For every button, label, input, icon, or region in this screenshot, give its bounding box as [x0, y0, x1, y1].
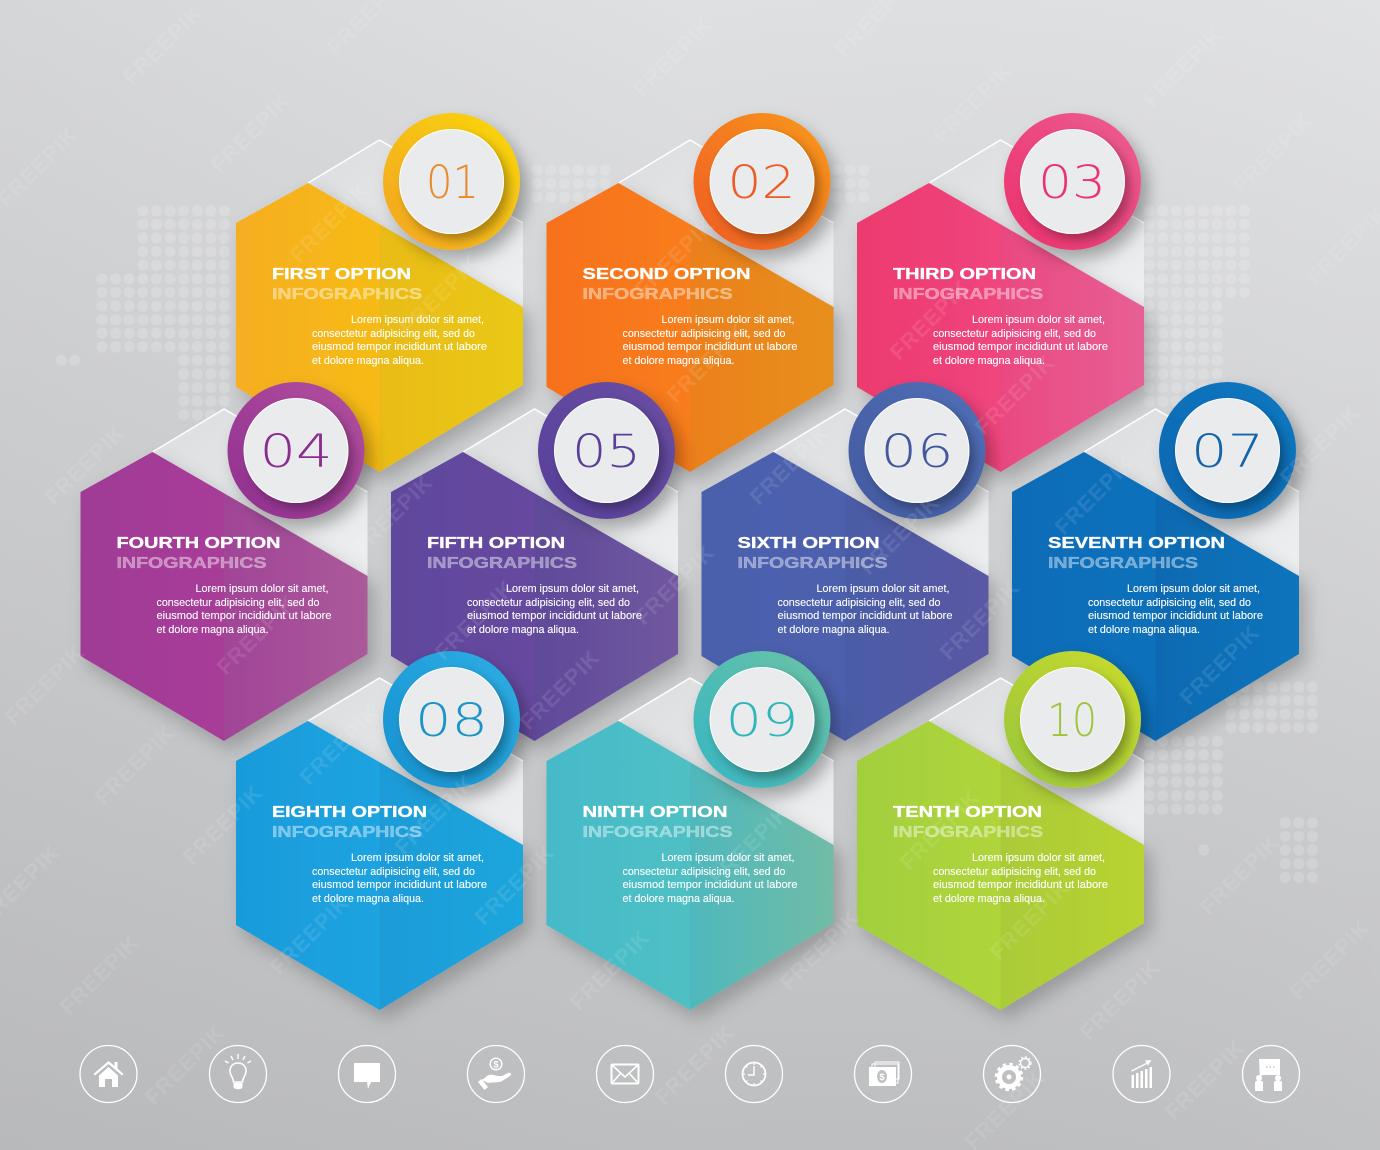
body text: et dolore magna aliqua.	[622, 893, 734, 905]
body text: consectetur adipisicing elit, sed do	[933, 328, 1096, 340]
heading: NINTH OPTION	[582, 804, 728, 821]
grey plate	[929, 678, 1144, 845]
watermark: FREEPIK	[265, 890, 355, 980]
body text	[622, 314, 798, 367]
body text	[312, 314, 487, 367]
watermark: FREEPIK	[348, 470, 438, 560]
watermark: FREEPIK	[206, 88, 296, 178]
panel: eighth option	[236, 651, 523, 1010]
subheading: INFOGRAPHICS	[582, 824, 732, 841]
hexagon	[857, 721, 1144, 1010]
body text: eiusmod tempor incididunt ut labore	[312, 341, 487, 353]
grey plate	[929, 140, 1144, 307]
number badge 06: 06	[880, 425, 954, 478]
icon: clock	[726, 1046, 782, 1102]
body text: Lorem ipsum dolor sit amet,	[351, 852, 484, 864]
watermark: FREEPIK	[895, 785, 985, 875]
grey plate	[618, 678, 834, 845]
number badge 01	[383, 113, 520, 250]
icon: home	[80, 1046, 137, 1102]
number badge 04: 04	[260, 425, 332, 478]
body text: et dolore magna aliqua.	[622, 355, 734, 367]
body text: et dolore magna aliqua.	[933, 355, 1045, 367]
number badge 09	[694, 651, 830, 788]
panel: fourth option	[80, 382, 368, 741]
panel: ninth option	[546, 651, 834, 1010]
body text: Lorem ipsum dolor sit amet,	[506, 583, 639, 595]
subheading: INFOGRAPHICS	[116, 555, 266, 572]
number badge 08	[383, 651, 520, 788]
number badge 03: 03	[1038, 156, 1106, 209]
watermark: FREEPIK	[1175, 620, 1265, 710]
heading: EIGHTH OPTION	[272, 804, 427, 821]
watermark: FREEPIK	[1075, 955, 1165, 1045]
hexagon	[702, 452, 988, 741]
panel: sixth option	[702, 382, 988, 741]
subheading: INFOGRAPHICS	[272, 824, 422, 841]
heading: THIRD OPTION	[893, 266, 1036, 283]
body text: consectetur adipisicing elit, sed do	[312, 866, 475, 878]
body text: Lorem ipsum dolor sit amet,	[196, 583, 328, 595]
watermark: FREEPIK	[775, 905, 865, 995]
watermark: FREEPIK	[285, 178, 375, 268]
watermark: FREEPIK	[55, 930, 145, 1020]
subheading: INFOGRAPHICS	[427, 555, 577, 572]
subheading: INFOGRAPHICS	[738, 555, 888, 572]
heading: FIRST OPTION	[272, 266, 411, 283]
watermark: FREEPIK	[430, 575, 520, 665]
watermark: FREEPIK	[515, 645, 605, 735]
body text: consectetur adipisicing elit, sed do	[622, 866, 786, 878]
number badge 08: 08	[415, 694, 488, 747]
watermark: FREEPIK	[178, 780, 268, 870]
panel: second option	[546, 113, 834, 472]
watermark: FREEPIK	[1138, 22, 1228, 112]
body text: eiusmod tempor incididunt ut labore	[312, 879, 487, 891]
number badge 02	[694, 113, 830, 250]
icon: rising bar chart	[1113, 1046, 1170, 1102]
number badge 07	[1159, 382, 1296, 519]
hexagon	[80, 452, 368, 741]
body text: et dolore magna aliqua.	[933, 893, 1045, 905]
hexagon	[857, 183, 1144, 472]
body text: eiusmod tempor incididunt ut labore	[622, 879, 798, 891]
icon: gears	[984, 1046, 1040, 1102]
body text: Lorem ipsum dolor sit amet,	[972, 852, 1105, 864]
hexagon	[236, 183, 523, 472]
hexagon	[1012, 452, 1299, 741]
watermark: FREEPIK	[390, 770, 480, 860]
watermark: FREEPIK	[1050, 450, 1140, 540]
body text: consectetur adipisicing elit, sed do	[933, 866, 1096, 878]
body text: consectetur adipisicing elit, sed do	[778, 597, 940, 609]
grey plate	[774, 409, 988, 576]
icon row	[80, 1046, 1300, 1102]
grey plate	[308, 140, 523, 307]
body text: eiusmod tempor incididunt ut labore	[467, 610, 642, 622]
panel: seventh option	[1012, 382, 1299, 741]
body text	[156, 583, 332, 636]
watermark: FREEPIK	[1160, 1035, 1250, 1125]
number badge 05: 05	[572, 425, 641, 478]
number badge 05	[538, 382, 675, 519]
watermark: FREEPIK	[630, 212, 720, 302]
subheading: INFOGRAPHICS	[893, 824, 1043, 841]
watermark: FREEPIK	[650, 1020, 740, 1110]
watermark: FREEPIK	[662, 318, 752, 408]
icon: hand with coin	[468, 1046, 524, 1102]
watermark: FREEPIK	[1275, 400, 1365, 490]
panel: first option	[236, 113, 523, 472]
grey plate	[463, 409, 678, 576]
body text: et dolore magna aliqua.	[312, 893, 424, 905]
grey plate	[152, 409, 368, 576]
body text: Lorem ipsum dolor sit amet,	[662, 852, 794, 864]
number badge 02: 02	[728, 156, 796, 209]
watermark: FREEPIK	[565, 925, 655, 1015]
grey plate	[618, 140, 834, 307]
watermark: FREEPIK	[885, 275, 975, 365]
heading: TENTH OPTION	[893, 804, 1042, 821]
icon: envelope	[596, 1046, 654, 1102]
watermark: FREEPIK	[40, 420, 130, 510]
body text: consectetur adipisicing elit, sed do	[467, 597, 630, 609]
body text: eiusmod tempor incididunt ut labore	[622, 341, 798, 353]
number badge 03	[1004, 113, 1141, 250]
subheading: INFOGRAPHICS	[582, 286, 732, 303]
watermark: FREEPIK	[140, 1020, 230, 1110]
hexagon	[546, 183, 834, 472]
body text: consectetur adipisicing elit, sed do	[156, 597, 320, 609]
body text: Lorem ipsum dolor sit amet,	[662, 314, 794, 326]
watermark: FREEPIK	[745, 420, 835, 510]
watermark: FREEPIK	[1285, 915, 1375, 1005]
heading: SEVENTH OPTION	[1048, 535, 1225, 552]
icon: speech bubble	[338, 1046, 396, 1102]
heading: SIXTH OPTION	[738, 535, 880, 552]
watermark: FREEPIK	[628, 12, 718, 102]
watermark: FREEPIK	[935, 575, 1025, 665]
panel: fifth option	[391, 382, 678, 741]
body text: Lorem ipsum dolor sit amet,	[1127, 583, 1260, 595]
hexagon	[546, 721, 834, 1010]
watermark: FREEPIK	[928, 58, 1018, 148]
number badge 10: 10	[1047, 694, 1097, 747]
panel: third option	[857, 113, 1144, 472]
watermark: FREEPIK	[985, 875, 1075, 965]
body text: eiusmod tempor incididunt ut labore	[933, 341, 1108, 353]
icon: people talking	[1242, 1046, 1300, 1102]
number badge 07: 07	[1191, 425, 1264, 478]
icon: light bulb	[210, 1046, 266, 1102]
icon: banknotes	[854, 1046, 912, 1102]
number badge 09: 09	[726, 694, 798, 747]
body text: et dolore magna aliqua.	[467, 624, 579, 636]
number badge 06	[848, 382, 986, 519]
body text: et dolore magna aliqua.	[1088, 624, 1200, 636]
dotted world map	[54, 163, 1319, 884]
body text: Lorem ipsum dolor sit amet,	[972, 314, 1105, 326]
watermark: FREEPIK	[470, 840, 560, 930]
watermark: FREEPIK	[855, 490, 945, 580]
body text	[933, 314, 1108, 367]
number badge 04	[228, 382, 364, 519]
body text: Lorem ipsum dolor sit amet,	[351, 314, 484, 326]
body text: eiusmod tempor incididunt ut labore	[156, 610, 332, 622]
body text: et dolore magna aliqua.	[156, 624, 268, 636]
body text	[622, 852, 798, 905]
body text	[467, 583, 642, 636]
watermark: FREEPIK	[90, 720, 180, 810]
watermark: FREEPIK	[970, 350, 1060, 440]
grey plate	[1084, 409, 1299, 576]
body text	[312, 852, 487, 905]
body text: Lorem ipsum dolor sit amet,	[816, 583, 950, 595]
subheading: INFOGRAPHICS	[272, 286, 422, 303]
body text: consectetur adipisicing elit, sed do	[312, 328, 475, 340]
body text: eiusmod tempor incididunt ut labore	[778, 610, 952, 622]
watermark: FREEPIK	[0, 640, 90, 730]
number badge 10	[1004, 651, 1141, 788]
watermark: FREEPIK	[395, 250, 485, 340]
icon: banknotes: $	[879, 1072, 885, 1083]
body text: et dolore magna aliqua.	[778, 624, 890, 636]
watermark: FREEPIK	[1228, 108, 1318, 198]
hexagon	[391, 452, 678, 741]
grey plate	[308, 678, 523, 845]
watermark: FREEPIK	[705, 800, 795, 890]
body text	[933, 852, 1108, 905]
subheading: INFOGRAPHICS	[1048, 555, 1198, 572]
subheading: INFOGRAPHICS	[893, 286, 1043, 303]
watermark: FREEPIK	[630, 540, 720, 630]
icon: hand with coin: $	[493, 1060, 499, 1070]
body text: et dolore magna aliqua.	[312, 355, 424, 367]
body text: consectetur adipisicing elit, sed do	[622, 328, 786, 340]
body text	[778, 583, 952, 636]
watermark: FREEPIK	[1195, 830, 1285, 920]
panel: tenth option	[857, 651, 1144, 1010]
heading: SECOND OPTION	[582, 266, 750, 283]
heading: FOURTH OPTION	[116, 535, 280, 552]
watermark: FREEPIK	[295, 700, 385, 790]
watermark: FREEPIK	[212, 590, 302, 680]
body text: consectetur adipisicing elit, sed do	[1088, 597, 1251, 609]
number badge 01: 01	[426, 156, 479, 209]
body text	[1088, 583, 1263, 636]
body text: eiusmod tempor incididunt ut labore	[933, 879, 1108, 891]
watermark: FREEPIK	[118, 0, 208, 90]
heading: FIFTH OPTION	[427, 535, 565, 552]
hexagon	[236, 721, 523, 1010]
body text: eiusmod tempor incididunt ut labore	[1088, 610, 1263, 622]
